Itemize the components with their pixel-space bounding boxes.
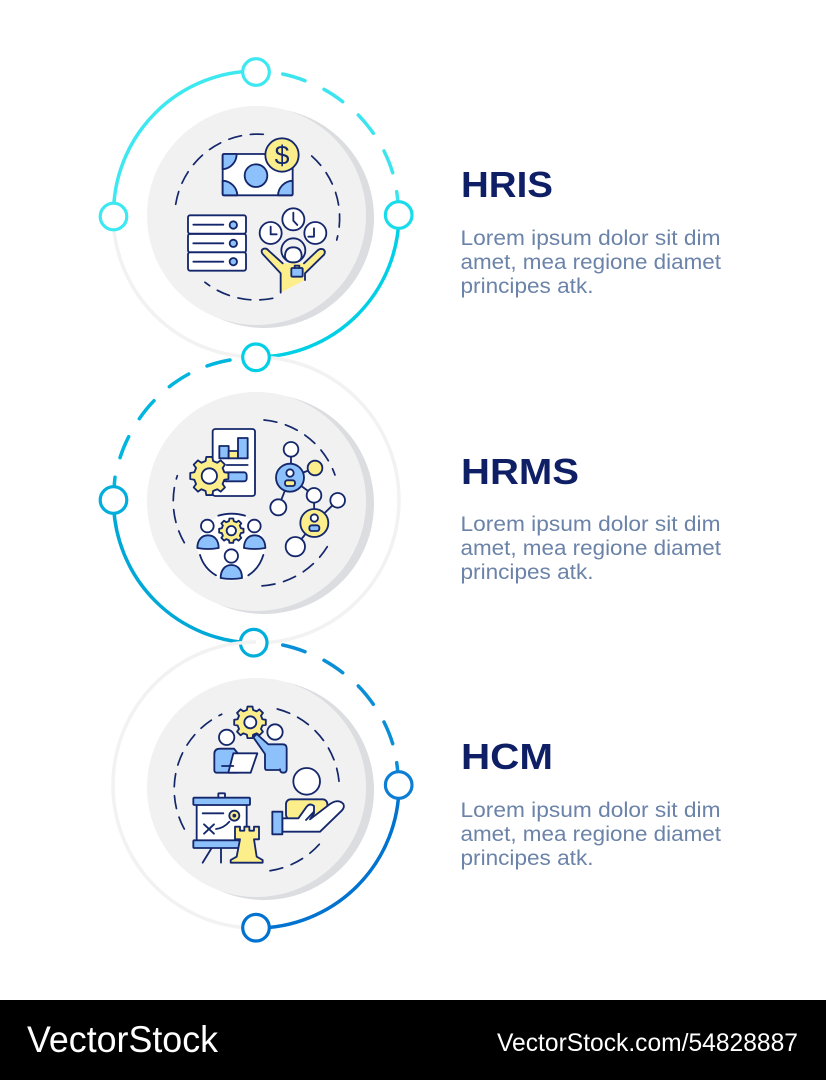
faint ring arc xyxy=(113,642,256,928)
dashed arc top to right xyxy=(283,74,398,200)
ring nodes xyxy=(100,59,412,230)
panel: HCM ring xyxy=(113,642,412,941)
footer brand: VectorStock xyxy=(27,1019,218,1060)
heading: HRMS: HRMS xyxy=(461,451,579,492)
dashed inner circle xyxy=(175,134,340,300)
icon: people network xyxy=(270,442,345,556)
dashed arc top to left xyxy=(114,360,230,485)
text: HRMS description: Lorem ipsum dolor sit dim xyxy=(460,512,720,536)
solid arc left to bottom xyxy=(114,500,256,643)
icon: banknote with dollar coin xyxy=(223,138,299,195)
footer image id: VectorStock.com/54828887 xyxy=(497,1029,798,1057)
text: HCM description: amet, mea regione diamet xyxy=(460,822,721,846)
grey disc xyxy=(147,678,366,897)
heading: HCM: HCM xyxy=(461,736,553,777)
heading: HRIS: HRIS xyxy=(461,164,553,205)
icons: report, network, team xyxy=(190,429,345,581)
text: HRIS description: amet, mea regione diamet xyxy=(460,250,721,274)
icon: strategy board with chess rook xyxy=(193,793,263,863)
icon: report with gear xyxy=(190,429,255,496)
text: HRMS description: principes atk. xyxy=(460,560,594,584)
faint ring arc xyxy=(113,214,256,357)
icon: server stack xyxy=(188,215,246,271)
solid arc right to bottom xyxy=(256,785,399,928)
faint ring arc xyxy=(256,357,399,643)
disc shadow xyxy=(154,680,374,900)
text: HRIS description: Lorem ipsum dolor sit dim xyxy=(460,226,720,250)
dashed inner circle xyxy=(174,709,339,871)
icons: collaboration, strategy, care xyxy=(193,707,344,863)
panel: HRMS ring xyxy=(100,344,399,656)
grey disc xyxy=(147,392,366,611)
panel: HRIS ring xyxy=(100,59,412,357)
text: HRIS description: principes atk. xyxy=(460,274,594,298)
footer bar xyxy=(0,1000,826,1080)
text: HCM description: principes atk. xyxy=(460,846,594,870)
icons: money, server, time management xyxy=(188,138,326,293)
solid arc left to top xyxy=(114,71,256,214)
ring nodes xyxy=(243,772,412,941)
icon: person juggling clocks xyxy=(260,208,326,293)
icon: team around gear xyxy=(197,514,265,581)
icon: hand holding person xyxy=(272,768,344,834)
icon: banknote with dollar coin: $ xyxy=(275,140,290,170)
dashed arc top to right xyxy=(283,645,398,771)
text: HRMS description: amet, mea regione diamet xyxy=(460,536,721,560)
text: HCM description: Lorem ipsum dolor sit dim xyxy=(460,798,720,822)
ring nodes xyxy=(100,344,269,656)
dashed inner circle xyxy=(173,420,335,586)
grey disc xyxy=(147,106,366,325)
disc shadow xyxy=(154,108,374,328)
solid arc right to bottom xyxy=(256,214,399,357)
icon: two people with gear xyxy=(214,707,287,773)
disc shadow xyxy=(154,394,374,614)
